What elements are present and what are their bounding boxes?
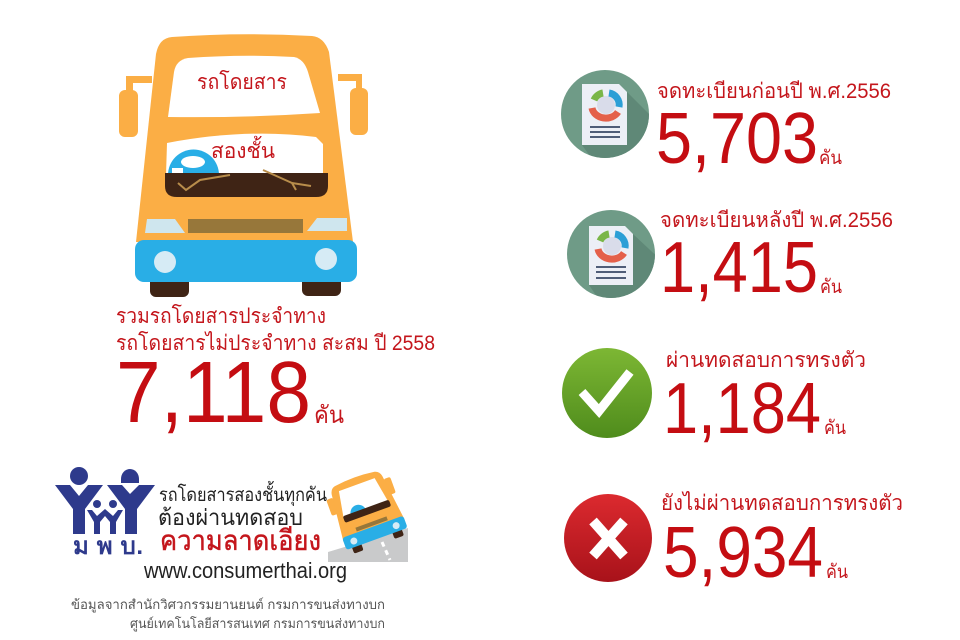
number: 1,415 [660,228,818,308]
bus mirrors [119,74,368,137]
headlights [154,251,176,273]
illustration: double-decker bus [119,34,368,297]
number: 5,703 [656,99,818,179]
total heading line 2: รถโดยสารไม่ประจำทาง สะสม ปี 2558 [116,331,435,355]
heading: จดทะเบียนหลังปี พ.ศ.2556 [660,209,893,232]
slogan line 1: รถโดยสารสองชั้นทุกคัน [159,481,327,507]
bus label lower: สองชั้น [211,136,275,163]
unit: คัน [824,418,846,439]
total heading: รวมรถโดยสารประจำทาง [116,304,326,328]
lower window [166,134,323,175]
steering wheel [168,150,219,175]
stat: registered before 2556 [561,70,891,179]
icon: mini bus on slope [322,466,411,562]
icon: green check [562,348,652,438]
upper window [168,56,320,117]
heading: ยังไม่ผ่านทดสอบการทรงตัว [661,491,903,515]
wipers [178,170,311,190]
source line 1: ข้อมูลจากสำนักวิศวกรรมยานยนต์ กรมการขนส่งทางบก [71,597,385,613]
stat: not passed tilt test [564,491,903,593]
dashboard [165,173,328,197]
logo slogan [143,481,347,583]
bus body [136,34,353,242]
logo: consumer foundation [55,467,155,560]
icon: red cross [564,494,652,582]
total unit: คัน [314,402,344,429]
road [328,528,408,562]
heading: จดทะเบียนก่อนปี พ.ศ.2556 [657,80,891,103]
lights and grille [145,219,185,233]
bumper [135,240,357,282]
unit: คัน [819,148,842,169]
slogan line 3: ความลาดเอียง [160,525,321,556]
source note [71,597,385,632]
bus label upper: รถโดยสาร [197,70,287,94]
stat: passed tilt test [562,348,866,449]
heading: ผ่านทดสอบการทรงตัว [666,349,866,372]
unit: คัน [820,277,842,298]
total number: 7,118 [116,344,311,441]
stat: registered after 2556 [567,209,893,310]
unit: คัน [826,562,848,583]
wheels [150,275,189,297]
icon: document chart [567,210,655,298]
source line 2: ศูนย์เทคโนโลยีสารสนเทศ กรมการขนส่งทางบก [130,616,385,632]
icon: document chart [561,70,649,158]
number: 5,934 [663,513,823,593]
slogan line 2: ต้องผ่านทดสอบ [158,505,303,530]
website: www.consumerthai.org [143,558,347,583]
total statistic [116,304,435,441]
number: 1,184 [663,369,821,449]
logo: consumer foundation: ม พ บ. [73,533,143,560]
